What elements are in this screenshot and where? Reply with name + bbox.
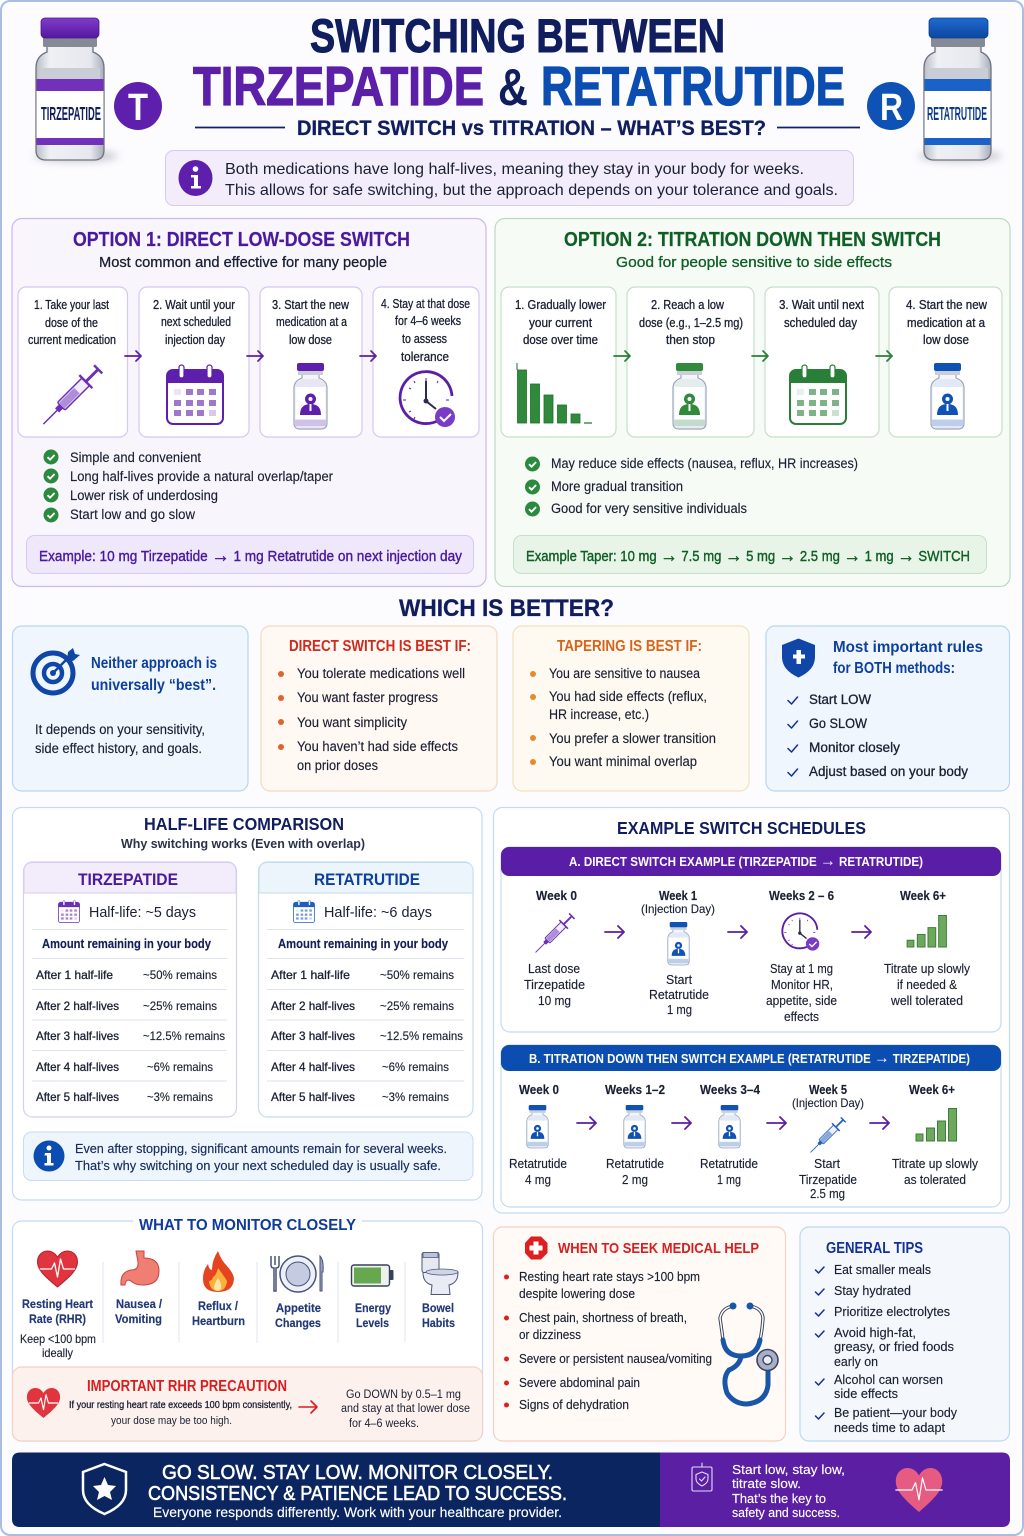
panel: when to seek medical help: WHEN TO SEEK MEDICAL HELP [558, 1240, 759, 1257]
arrow [299, 1401, 317, 1413]
footer banner: That’s the key to [732, 1491, 826, 1506]
badge: T [114, 82, 162, 130]
step 4: 4. Start the new [906, 298, 988, 312]
step: week 0: 10 mg [538, 994, 571, 1008]
table: retatrutide: RETATRUTIDE [314, 871, 420, 889]
icon: clock [400, 372, 455, 427]
panel: general tips: Eat smaller meals [834, 1263, 931, 1277]
footer banner: GO SLOW. STAY LOW. MONITOR CLOSELY. [162, 1462, 553, 1484]
table: retatrutide: After 1 half-life [271, 968, 350, 982]
step 2: then stop [666, 333, 715, 347]
option 1 heading: OPTION 1: DIRECT LOW-DOSE SWITCH [73, 229, 410, 251]
example taper callout: → [725, 545, 742, 567]
half-life note [24, 1132, 473, 1180]
example taper callout: 2.5 mg [796, 548, 844, 565]
benefits list: More gradual transition [551, 479, 683, 494]
card: tapering is best if: You had side effects (reflux, [549, 689, 707, 704]
card: tapering is best if [513, 626, 749, 791]
panel: when to seek medical help: Signs of dehydration [519, 1398, 629, 1412]
step: week 1: Start [666, 973, 693, 987]
table: tirzepatide: ~50% remains [143, 968, 217, 982]
example taper callout: → [779, 545, 796, 567]
item: bowel: Bowel [422, 1301, 454, 1315]
panel: general tips: Be patient—your body [834, 1406, 958, 1420]
step 1 [501, 287, 616, 437]
icon: stethoscope [720, 1302, 778, 1404]
step: week 0: Last dose [528, 962, 580, 976]
example taper callout: → [897, 545, 915, 567]
step: week 5: Tirzepatide [799, 1173, 857, 1187]
half-life note: Even after stopping, significant amounts remain for several weeks. [75, 1142, 447, 1156]
badge: R [867, 82, 915, 130]
item: resting heart rate: Rate (RHR) [29, 1312, 86, 1326]
title line 2: & [498, 59, 528, 117]
half-life subheading: Why switching works (Even with overlap) [121, 836, 365, 851]
footer banner: titrate slow. [732, 1476, 801, 1491]
step: weeks 3-4 [700, 1083, 760, 1187]
panel: when to seek medical help: Severe abdominal pain [519, 1376, 640, 1390]
info banner [166, 150, 854, 206]
icon: shield [782, 638, 815, 678]
panel: general tips: GENERAL TIPS [826, 1240, 923, 1257]
table: tirzepatide: ~12.5% remains [143, 1029, 225, 1043]
title line 2: TIRZEPATIDE [193, 55, 484, 117]
step: weeks 1-2: Weeks 1–2 [605, 1083, 665, 1097]
panel: general tips: Prioritize electrolytes [834, 1305, 950, 1319]
card: tapering is best if: HR increase, etc.) [549, 707, 649, 722]
item: resting heart rate: Resting Heart [22, 1297, 93, 1311]
step 4 [373, 287, 479, 437]
card: direct switch is best if: on prior doses [297, 758, 378, 773]
example callout: Example: 10 mg Tirzepatide [39, 548, 225, 565]
card: direct switch is best if [261, 626, 497, 791]
step 2: 2. Wait until your [153, 298, 235, 312]
callout: RHR precaution [12, 1367, 482, 1441]
item: reflux: Heartburn [192, 1314, 245, 1328]
step: week 1: (Injection Day) [641, 902, 715, 916]
panel: general tips: needs time to adapt [834, 1421, 946, 1435]
step: week 6+ [884, 889, 971, 1008]
table: tirzepatide: ~25% remains [143, 999, 217, 1013]
step 4 [889, 287, 1002, 437]
schedule B [501, 1045, 1001, 1207]
step 1: your current [529, 316, 592, 330]
benefits list [44, 450, 333, 522]
card: most important rules: Most important rules [833, 639, 983, 656]
step 4: 4. Stay at that dose [381, 297, 470, 311]
option 2 heading: OPTION 2: TITRATION DOWN THEN SWITCH [564, 229, 941, 251]
step 4: low dose [923, 333, 969, 347]
table: tirzepatide: After 3 half-lives [36, 1029, 119, 1043]
step: week 6+: well tolerated [890, 994, 963, 1008]
step: week 6+: Week 6+ [900, 889, 946, 903]
callout: RHR precaution: Go DOWN by 0.5–1 mg [346, 1389, 461, 1401]
step 1: dose over time [523, 333, 598, 347]
vial: tirzepatide: TIRZEPATIDE [41, 104, 101, 124]
callout: RHR precaution: and stay at that lower dose [341, 1403, 470, 1415]
footer banner: safety and success. [732, 1505, 840, 1520]
card: most important rules [766, 626, 1010, 791]
subtitle: DIRECT SWITCH vs TITRATION – WHAT’S BEST? [297, 116, 766, 140]
badge: R: R [880, 87, 903, 129]
step: week 1 [641, 889, 715, 1017]
icon: syringe [37, 363, 105, 431]
panel: option 2 [495, 218, 1010, 586]
badge: T: T [128, 87, 148, 129]
table: retatrutide: Amount remaining in your body [278, 937, 448, 951]
panel: when to seek medical help: Chest pain, shortness of breath, [519, 1311, 687, 1325]
title line 2 [193, 55, 845, 117]
card: most important rules: Monitor closely [809, 740, 900, 755]
card: neither approach: side effect history, and goals. [35, 741, 202, 756]
step 3 [765, 287, 879, 437]
panel: when to seek medical help: Resting heart rate stays >100 bpm [519, 1270, 700, 1284]
benefits list: Good for very sensitive individuals [551, 501, 747, 516]
step 3: 3. Wait until next [779, 298, 864, 312]
item: energy: Energy [355, 1301, 391, 1315]
option 1 subheading: Most common and effective for many people [99, 254, 387, 271]
step 2: 2. Reach a low [651, 298, 725, 312]
step: week 0: 4 mg [525, 1173, 551, 1187]
card: most important rules: Start LOW [809, 692, 871, 707]
item: appetite: Changes [275, 1316, 321, 1330]
arrows [614, 351, 892, 361]
step: weeks 1-2: 2 mg [622, 1173, 648, 1187]
monitor heading: WHAT TO MONITOR CLOSELY [139, 1217, 356, 1234]
table: tirzepatide: After 2 half-lives [36, 999, 119, 1013]
panel: general tips: Alcohol can worsen [834, 1373, 943, 1387]
table: retatrutide: ~6% remains [382, 1060, 449, 1074]
panel: when to seek medical help: despite lowering dose [519, 1287, 635, 1301]
footer banner: Everyone responds differently. Work with your healthcare provider. [153, 1505, 562, 1520]
card: tapering is best if: You prefer a slower transition [549, 731, 716, 746]
icon: clipboard shield [692, 1463, 712, 1491]
benefits list: Start low and go slow [70, 507, 195, 522]
example callout [26, 536, 474, 574]
chart: descending dose bars [517, 363, 592, 423]
step 3: medication at a [276, 315, 347, 329]
card: neither approach: It depends on your sensitivity, [35, 722, 205, 737]
icon: calendar [167, 365, 223, 424]
benefits list: Lower risk of underdosing [70, 488, 218, 503]
item: reflux: Reflux / [198, 1299, 239, 1313]
icon: info [178, 160, 212, 196]
step 3 [260, 287, 362, 437]
step: week 6+: Titrate up slowly [892, 1157, 979, 1171]
icon: green vial [673, 363, 706, 429]
step: week 5: 2.5 mg [810, 1187, 845, 1201]
card: most important rules: for BOTH methods: [833, 660, 955, 677]
item: reflux [192, 1251, 245, 1328]
item: resting heart rate: ideally [42, 1346, 73, 1360]
example callout: → [212, 545, 230, 567]
step: weeks 1-2 [605, 1083, 665, 1187]
step 1: current medication [28, 333, 116, 347]
step: weeks 3-4: Retatrutide [700, 1157, 758, 1171]
icon: green calendar [790, 365, 846, 424]
table: retatrutide: Half-life: ~6 days [324, 905, 432, 921]
step: weeks 2-6: Monitor HR, [771, 978, 833, 992]
panel: when to seek medical help: Severe or persistent nausea/vomiting [519, 1352, 712, 1366]
example taper callout: → [660, 545, 678, 567]
example taper callout: 5 mg [742, 548, 779, 565]
panel: when to seek medical help: or dizziness [519, 1328, 581, 1342]
table: retatrutide: After 5 half-lives [271, 1090, 355, 1104]
schedule A [501, 847, 1001, 1032]
icon: calendar [293, 900, 315, 923]
icon: shield star [83, 1464, 126, 1514]
benefits list: Long half-lives provide a natural overlap/taper [70, 469, 333, 484]
step: weeks 2-6: Stay at 1 mg [770, 962, 833, 976]
step: weeks 2-6 [766, 889, 837, 1024]
step: weeks 3-4: Weeks 3–4 [700, 1083, 760, 1097]
table: retatrutide: After 3 half-lives [271, 1029, 355, 1043]
vial: tirzepatide [34, 18, 118, 162]
table: retatrutide: After 4 half-lives [271, 1060, 355, 1074]
example taper callout: 1 mg [861, 548, 897, 565]
table: retatrutide: After 2 half-lives [271, 999, 355, 1013]
benefits list: Simple and convenient [70, 450, 201, 465]
item: resting heart rate [20, 1251, 96, 1360]
step: week 6+: Titrate up slowly [884, 962, 971, 976]
step 3: scheduled day [784, 316, 858, 330]
step: week 0 [524, 889, 585, 1008]
arrows [605, 926, 871, 938]
card: neither approach [12, 626, 248, 791]
item: bowel [422, 1252, 458, 1330]
panel: general tips: greasy, or fried foods [834, 1340, 954, 1354]
title line 1: SWITCHING BETWEEN [310, 9, 725, 62]
table: retatrutide: ~12.5% remains [380, 1029, 463, 1043]
step 3: low dose [289, 333, 332, 347]
panel: general tips: side effects [834, 1387, 898, 1401]
table: retatrutide: ~50% remains [380, 968, 454, 982]
item: energy [352, 1265, 394, 1330]
step: week 5: Start [814, 1157, 841, 1171]
item: appetite: Appetite [276, 1301, 321, 1315]
card: direct switch is best if: You want faster progress [297, 690, 438, 705]
panel: example switch schedules [494, 808, 1010, 1213]
step: week 1: Week 1 [659, 889, 697, 903]
card: tapering is best if: You are sensitive to nausea [549, 666, 700, 681]
arrows [577, 1117, 889, 1129]
callout: RHR precaution: IMPORTANT RHR PRECAUTION [87, 1378, 287, 1395]
step: week 6+: if needed & [897, 978, 958, 992]
step: week 1: 1 mg [667, 1003, 692, 1017]
arrows [125, 351, 376, 361]
item: nausea: Nausea / [116, 1297, 163, 1311]
example taper callout: 7.5 mg [678, 548, 725, 565]
step: week 0: Retatrutide [509, 1157, 567, 1171]
step: weeks 1-2: Retatrutide [606, 1157, 664, 1171]
step 2: dose (e.g., 1–2.5 mg) [639, 316, 743, 330]
panel: general tips: Stay hydrated [834, 1284, 911, 1298]
icon: medical cross [525, 1236, 548, 1260]
title line 2: RETATRUTIDE [541, 55, 845, 117]
step 1 [18, 287, 128, 437]
option 2 subheading: Good for people sensitive to side effects [616, 254, 892, 271]
panel: when to seek medical help [494, 1227, 786, 1441]
card: neither approach: universally “best”. [91, 677, 216, 694]
icon: calendar [58, 900, 80, 923]
card: direct switch is best if: You tolerate medications well [297, 666, 465, 681]
step 3: 3. Start the new [272, 298, 350, 312]
example callout: 1 mg Retatrutide on next injection day [230, 548, 462, 565]
panel: half-life comparison [12, 808, 482, 1200]
step: week 5 [792, 1083, 864, 1201]
step: week 1: Retatrutide [649, 988, 709, 1002]
card: direct switch is best if: You haven’t had side effects [297, 739, 458, 754]
schedule A header bar [501, 847, 1001, 876]
schedule B header bar: B. TITRATION DOWN THEN SWITCH EXAMPLE (RETATRUTIDE → TIRZEPATIDE) [529, 1048, 970, 1067]
step: weeks 2-6: appetite, side [766, 994, 837, 1008]
step: week 0: Week 0 [519, 1083, 559, 1097]
example taper callout: Example Taper: 10 mg [526, 548, 676, 565]
card: direct switch is best if: You want simplicity [297, 715, 407, 730]
benefits list [525, 456, 858, 516]
info banner: Both medications have long half-lives, meaning they stay in your body for weeks. [225, 161, 804, 178]
step 2: next scheduled [161, 315, 231, 329]
table: tirzepatide: Half-life: ~5 days [89, 905, 196, 921]
schedule A header bar: A. DIRECT SWITCH EXAMPLE (TIRZEPATIDE → RETATRUTIDE) [569, 851, 923, 870]
item: resting heart rate: Keep <100 bpm [20, 1332, 96, 1346]
callout: RHR precaution: If your resting heart rate exceeds 100 bpm consistently, [69, 1400, 292, 1411]
table: tirzepatide: TIRZEPATIDE [78, 871, 178, 889]
footer banner: CONSISTENCY & PATIENCE LEAD TO SUCCESS. [148, 1483, 567, 1505]
icon: heart [896, 1468, 942, 1512]
table: retatrutide: ~3% remains [382, 1090, 449, 1104]
icon: vial [294, 363, 327, 429]
step 4: for 4–6 weeks [395, 314, 461, 328]
step: week 0 [509, 1083, 567, 1187]
card: neither approach: Neither approach is [91, 655, 217, 672]
step: weeks 3-4: 1 mg [717, 1173, 741, 1187]
step 1: dose of the [45, 316, 98, 330]
icon: heart [27, 1388, 60, 1418]
callout: RHR precaution: your dose may be too high. [111, 1415, 232, 1427]
table: tirzepatide: After 4 half-lives [36, 1060, 119, 1074]
step: week 6+ [892, 1083, 979, 1187]
heading: which is better: WHICH IS BETTER? [399, 595, 614, 622]
example taper callout: SWITCH [915, 548, 970, 565]
panel: option 1 [12, 218, 486, 586]
step 4: tolerance [401, 350, 449, 364]
footer banner: Start low, stay low, [732, 1462, 845, 1477]
schedule B header bar [501, 1045, 1001, 1071]
step: week 0: Week 0 [536, 889, 577, 903]
step: week 6+: as tolerated [904, 1173, 966, 1187]
card: most important rules: Adjust based on your body [809, 764, 968, 779]
panel: general tips [800, 1227, 1010, 1441]
step 1: 1. Gradually lower [515, 298, 606, 312]
step: week 6+: Week 6+ [909, 1083, 955, 1097]
icon: blue vial [931, 363, 964, 429]
step: weeks 2-6: Weeks 2 – 6 [769, 889, 834, 903]
example taper callout [514, 536, 986, 574]
item: nausea: Vomiting [115, 1312, 162, 1326]
step 1: 1. Take your last [34, 298, 109, 312]
table: tirzepatide: Amount remaining in your body [42, 937, 211, 951]
step 2 [627, 287, 754, 437]
benefits list: May reduce side effects (nausea, reflux, HR increases) [551, 456, 858, 471]
item: appetite [271, 1256, 323, 1330]
table: retatrutide: ~25% remains [380, 999, 454, 1013]
panel: general tips: early on [834, 1355, 878, 1369]
step: week 0: Tirzepatide [524, 978, 585, 992]
table: tirzepatide: ~6% remains [147, 1060, 213, 1074]
card: tapering is best if: You want minimal overlap [549, 754, 697, 769]
table: tirzepatide: After 1 half-life [36, 968, 113, 982]
step 4: medication at a [907, 316, 985, 330]
table: tirzepatide: After 5 half-lives [36, 1090, 119, 1104]
item: nausea [115, 1251, 163, 1326]
card: tapering is best if: TAPERING IS BEST IF: [557, 638, 702, 655]
info banner: This allows for safe switching, but the approach depends on your tolerance and goals. [225, 182, 838, 199]
half-life heading: HALF-LIFE COMPARISON [144, 814, 344, 834]
table: tirzepatide: ~3% remains [147, 1090, 213, 1104]
icon: target [33, 648, 80, 693]
step 2 [139, 287, 249, 437]
schedules heading: EXAMPLE SWITCH SCHEDULES [617, 818, 866, 838]
callout: RHR precaution: for 4–6 weeks. [349, 1418, 419, 1430]
table: tirzepatide [24, 862, 236, 1117]
item: energy: Levels [356, 1316, 389, 1330]
table: retatrutide [258, 862, 473, 1117]
step: week 5: Week 5 [809, 1083, 847, 1097]
step 4: to assess [402, 332, 447, 346]
panel: general tips: Avoid high-fat, [834, 1326, 916, 1340]
item: bowel: Habits [422, 1316, 455, 1330]
card: most important rules: Go SLOW [809, 716, 867, 731]
step 2: injection day [165, 333, 226, 347]
card: direct switch is best if: DIRECT SWITCH IS BEST IF: [289, 638, 471, 655]
step: weeks 2-6: effects [784, 1010, 819, 1024]
half-life note: That’s why switching on your next scheduled day is usually safe. [75, 1159, 441, 1173]
footer banner [12, 1452, 1010, 1527]
panel: what to monitor closely [12, 1215, 482, 1441]
example taper callout: → [844, 545, 861, 567]
vial: retatrutide [918, 18, 1002, 162]
step: week 5: (Injection Day) [792, 1096, 864, 1110]
